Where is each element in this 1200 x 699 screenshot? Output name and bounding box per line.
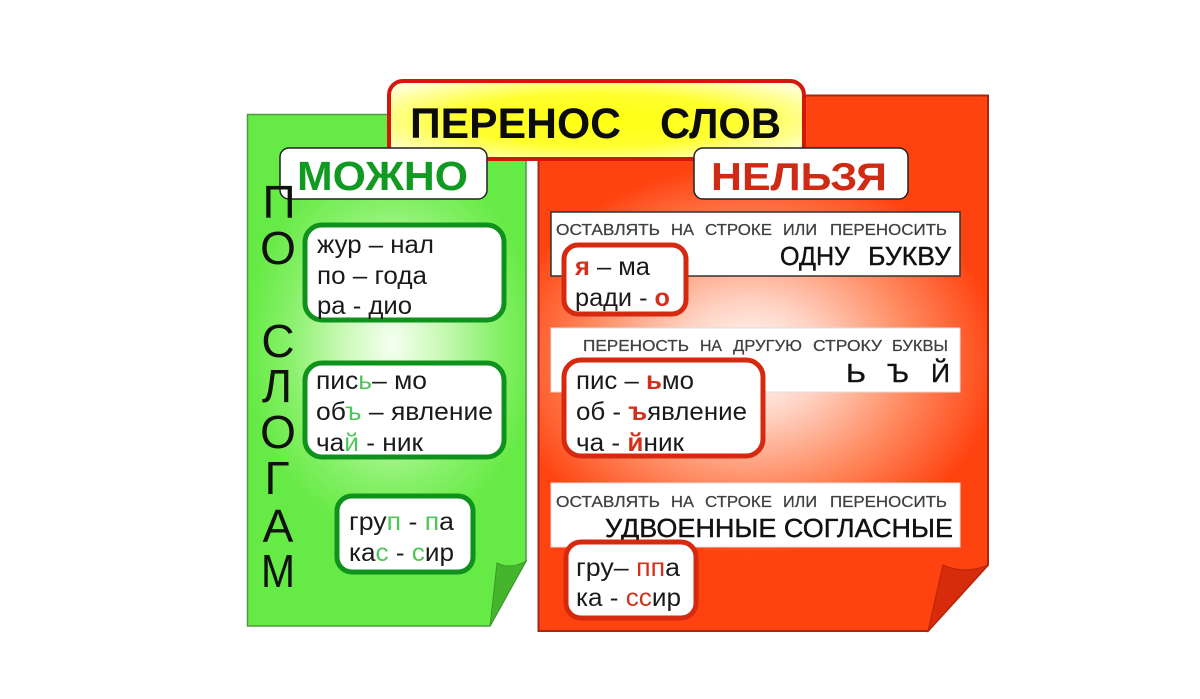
rule banner: ь ъ й: ПЕРЕНОСТЬ: [583, 338, 689, 355]
example box: письмо: пись– мо: [316, 367, 427, 395]
vertical text: по слогам: А: [263, 500, 294, 552]
rule banner: одну букву: ИЛИ: [783, 222, 817, 239]
rule banner: удвоенные согласные: ОСТАВЛЯТЬ: [556, 494, 660, 511]
example box: группа неверно: [566, 542, 696, 618]
example box: письмо неверно: пис – ьмо: [576, 367, 694, 395]
rule banner: одну букву: БУКВУ: [868, 241, 951, 271]
rule banner: ь ъ й: Ъ: [887, 358, 909, 388]
rule banner: удвоенные согласные: ИЛИ: [783, 494, 817, 511]
heading: нельзя: НЕЛЬЗЯ: [711, 156, 887, 199]
rule banner: ь ъ й: СТРОКУ: [813, 338, 883, 355]
rule banner: удвоенные согласные: ПЕРЕНОСИТЬ: [830, 494, 947, 511]
rule banner: одну букву: ОСТАВЛЯТЬ: [556, 222, 660, 239]
title: [389, 81, 804, 159]
example box: я-ма: ради - о: [575, 284, 670, 312]
icon: green page fold: [490, 561, 526, 626]
example box: жур-нал: жур – нал: [317, 231, 434, 259]
example box: письмо неверно: ча - йник: [576, 429, 685, 457]
example box: группа: груп - па: [349, 508, 454, 536]
rule banner: ь ъ й: НА: [700, 338, 722, 355]
vertical text: по слогам: М: [261, 545, 295, 597]
heading: можно: МОЖНО: [297, 153, 468, 199]
rule banner: одну букву: НА: [671, 222, 694, 239]
title: СЛОВ: [660, 100, 781, 148]
example box: письмо: объ – явление: [316, 398, 493, 426]
rule banner: ь ъ й: ДРУГУЮ: [733, 338, 802, 355]
example box: письмо: [305, 363, 504, 457]
example box: группа: [337, 496, 473, 572]
heading: нельзя: [694, 148, 908, 199]
panel: green "можно" sheet: [248, 114, 526, 626]
example box: я-ма: [564, 245, 686, 314]
example box: письмо неверно: [564, 360, 763, 457]
example box: группа неверно: ка - ссир: [576, 584, 681, 612]
vertical text: по слогам: П: [262, 176, 296, 228]
rule banner: ь ъ й: Ь: [846, 358, 866, 388]
rule banner: одну букву: [551, 212, 960, 276]
example box: группа: кас - сир: [349, 539, 454, 567]
rule banner: удвоенные согласные: [551, 483, 960, 547]
rule banner: одну букву: ОДНУ: [780, 241, 850, 271]
panel: red "нельзя" sheet: [538, 96, 988, 631]
example box: письмо: чай - ник: [316, 429, 424, 457]
rule banner: ь ъ й: БУКВЫ: [892, 338, 948, 355]
vertical text: по слогам: С: [261, 315, 295, 367]
rule banner: ь ъ й: [551, 328, 960, 392]
icon: red page fold: [928, 565, 988, 631]
example box: группа неверно: гру– ппа: [576, 554, 680, 582]
vertical text: по слогам: Л: [262, 360, 292, 412]
rule banner: одну букву: ПЕРЕНОСИТЬ: [830, 222, 947, 239]
vertical text: по слогам: О: [260, 222, 296, 274]
vertical text: по слогам: [260, 176, 296, 597]
rule banner: удвоенные согласные: СТРОКЕ: [705, 494, 772, 511]
rule banner: ь ъ й: Й: [931, 358, 950, 388]
example box: жур-нал: ра - дио: [317, 292, 412, 320]
example box: письмо неверно: об - ъявление: [576, 398, 747, 426]
title: ПЕРЕНОС: [410, 100, 621, 148]
rule banner: удвоенные согласные: НА: [671, 494, 694, 511]
example box: я-ма: я – ма: [574, 253, 650, 281]
example box: жур-нал: по – года: [317, 262, 427, 290]
rule banner: одну букву: СТРОКЕ: [705, 222, 772, 239]
rule banner: удвоенные согласные: УДВОЕННЫЕ СОГЛАСНЫЕ: [605, 513, 953, 543]
example box: жур-нал: [305, 225, 504, 320]
vertical text: по слогам: Г: [265, 452, 290, 504]
vertical text: по слогам: О: [260, 406, 296, 458]
